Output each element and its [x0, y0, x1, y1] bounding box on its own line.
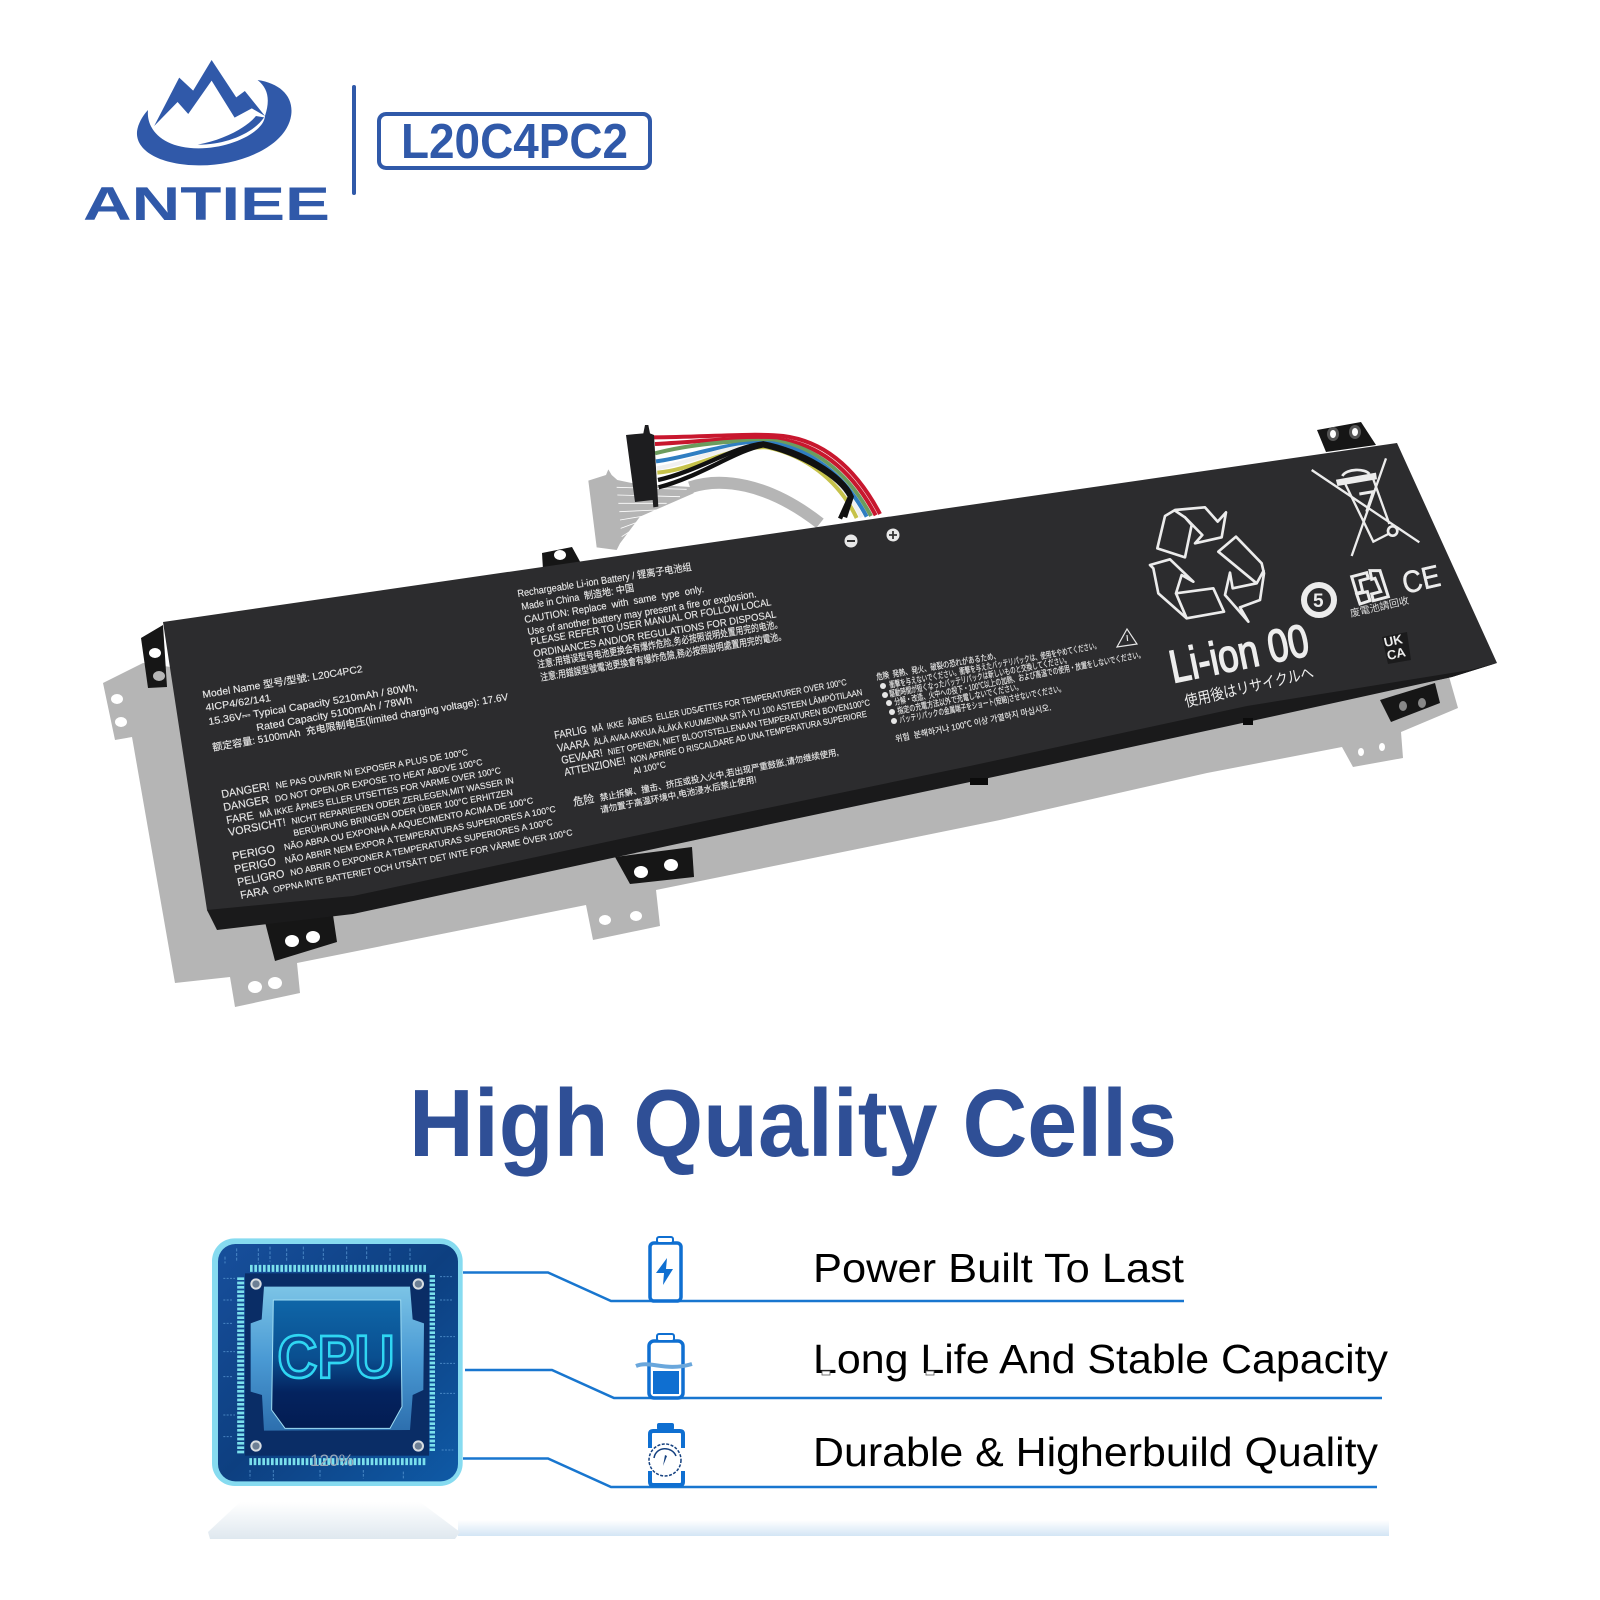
icon: battery with bolt — [650, 1237, 681, 1301]
battery label: caution block: Use of another battery may present a fire or explosion. — [527, 589, 757, 638]
battery label: caution block: Made in China 制造地: 中国 — [520, 581, 635, 613]
battery label: danger warnings: PERIGO NÃO ABRIR NEM EXPOR A TEMPERATURAS SUPERIORES A 100°C — [233, 803, 557, 876]
battery label: danger warnings: FARE MÅ IKKE ÅPNES ELLER UTSETTES FOR VARME OVER 100°C — [225, 764, 502, 827]
battery label: multilingual warnings: FARLIG MÅ IKKE ÅBNES ELLER UDSÆTTES FOR TEMPERATURER OVER 100°C — [553, 676, 848, 742]
battery label: multilingual warnings: 危险 禁止拆解、撞击、挤压或投入火中,若出现严重鼓胀,请勿继续使用, — [572, 744, 840, 809]
battery label: caution block — [516, 560, 787, 684]
battery label: Japanese and Korean warnings: 駆動時間が短くなったバッテリパックは新しいものと交換してください。 — [888, 653, 1071, 699]
CPU text: CPU — [277, 1324, 395, 1391]
battery label: model and capacity: 4ICP4/62/141 — [205, 693, 272, 714]
icon: battery with gauge — [649, 1423, 683, 1485]
battery label: Japanese and Korean warnings: 衝撃を与えないでください。衝撃を与えたバッテリパックは、使用をやめてください。 — [888, 639, 1101, 690]
battery label: Japanese and Korean warnings — [875, 639, 1145, 744]
battery label: multilingual warnings: AI 100°C — [632, 759, 667, 776]
battery label: danger warnings — [220, 746, 574, 902]
battery label: Japanese and Korean warnings: 危険 発熱、発火、破裂の恐れがあるため、 — [875, 649, 1000, 682]
circuit traces — [223, 1247, 455, 1480]
Li-ion mark — [1165, 614, 1316, 711]
feature: Long Life And Stable Capacity: Long Life And Stable Capacity — [813, 1336, 1389, 1382]
edge notches — [970, 718, 1253, 785]
mounting tabs — [141, 422, 1440, 961]
divider — [352, 85, 356, 195]
chip carrier — [251, 1287, 424, 1431]
battery label: danger warnings: VORSICHT! NICHT REPARIEREN ODER ZERLEGEN,MIT WASSER IN — [227, 774, 515, 839]
CPU reflection — [208, 1502, 460, 1539]
battery label: caution block: ORDINANCES AND/OR REGULATIONS FOR DISPOSAL — [533, 609, 778, 660]
battery label: multilingual warnings — [553, 676, 872, 815]
icon: RoHS 5 mark — [1304, 585, 1334, 615]
Japanese recycle text: 使用後はリサイクルへ — [1183, 664, 1316, 711]
battery label: model and capacity: Rated Capacity 5100mAh / 78Wh — [256, 695, 413, 734]
battery label: Japanese and Korean warnings: 指定の充電方法以外で充電しないでください。 — [896, 680, 1023, 716]
battery label: multilingual warnings: GEVAAR! NIET OPENEN, NIET BLOOTSTELLENAAN TEMPERATUREN BOVEN100°C — [560, 696, 872, 767]
battery label: caution block: 注意:用错误型号电池更换会有爆炸危险,务必按照说明处置用完的电池。 — [536, 617, 783, 671]
battery label: model and capacity: Model Name 型号/型號: L20C4PC2 — [201, 662, 364, 701]
battery label: danger warnings: FARA OPPNA INTE BATTERIET OCH UTSÄTT DET INTE FOR VÄRME ÖVER 100°C — [239, 826, 574, 902]
battery label: danger warnings: BERÜHRUNG BRINGEN ODER ÜBER 100°C ERHITZEN — [293, 787, 514, 838]
lower dark edge — [207, 663, 1497, 930]
body — [163, 443, 1497, 928]
battery label: caution block: PLEASE REFER TO USER MANUAL OR FOLLOW LOCAL — [530, 597, 773, 648]
connector — [626, 425, 658, 507]
wire shadow — [588, 469, 820, 550]
UKCA mark — [1382, 631, 1411, 664]
wordmark: ANTIEE — [83, 177, 330, 230]
icon: RoHS 5 mark: 5 — [1313, 591, 1324, 612]
feature: Power Built To Last: Power Built To Last — [813, 1245, 1185, 1291]
icon: battery recycling mark — [1349, 571, 1410, 620]
reflection band — [208, 1502, 1389, 1539]
heading: High Quality Cells — [409, 1070, 1177, 1177]
icon: recycle symbol — [1150, 507, 1264, 622]
panel: CPU chip — [212, 1238, 463, 1486]
Li-ion mark: Li-ion 00 — [1165, 614, 1313, 693]
icon: battery half full with wave — [636, 1334, 692, 1398]
battery label: Japanese and Korean warnings: 위험 분해하거나 100℃ 이상 가열하지 마십시오. — [894, 702, 1052, 744]
battery shadow — [103, 520, 1458, 1007]
battery body — [141, 422, 1497, 961]
UKCA mark: UK — [1383, 631, 1405, 650]
battery wires and connector — [626, 425, 880, 519]
battery label: danger warnings: DANGER! NE PAS OUVRIR NI EXPOSER A PLUS DE 100°C — [220, 746, 469, 801]
tab holes — [149, 425, 1426, 947]
battery label: caution block: 注意:用錯誤型號電池更換會有爆炸危險,務必按照說明處置用完的電池。 — [539, 629, 787, 684]
CE mark: CE — [1399, 558, 1444, 601]
socket — [245, 1273, 429, 1456]
battery label: multilingual warnings: VAARA ÄLÄ AVAA AKKUA ÄLÄKÄ KUUMENNA SITÄ YLI 100 ASTEEN LÄMPÖTILAAN — [556, 686, 863, 755]
pins — [241, 1268, 432, 1462]
icon: mountain and swoosh — [137, 60, 292, 165]
model number badge: L20C4PC2 — [401, 115, 628, 169]
battery label: danger warnings: PELIGRO NO ABRIR O EXPONER A TEMPERATURAS SUPERIORES A 100°C — [236, 816, 554, 889]
battery label: Japanese and Korean warnings: 分解・改造、火中への投下・100℃以上の加熱、および高温での使用・放置をしないでください。 — [893, 648, 1145, 707]
battery label: caution block: Rechargeable Li-ion Battery / 锂离子电池组 — [516, 560, 692, 600]
screws — [251, 1279, 423, 1451]
battery label: multilingual warnings: ATTENZIONE! NON APRIRE O RISCALDARE AD UNA TEMPERATURA SUPERIORE — [563, 708, 868, 779]
battery label: danger warnings: DANGER DO NOT OPEN,OR EXPOSE TO HEAT ABOVE 100°C — [222, 756, 484, 814]
percent: 120% — [310, 1451, 354, 1470]
battery label: model and capacity: 15.36V⎓ Typical Capacity 5210mAh / 80Wh, — [208, 682, 419, 728]
caption: 废電池請回收 — [1349, 594, 1410, 620]
battery label: model and capacity: 额定容量: 5100mAh 充电限制电压(limited charging voltage): 17.6V — [211, 690, 509, 754]
battery label: multilingual warnings: 请勿置于高温环境中,电池浸水后禁止使用! — [599, 773, 757, 815]
chip die — [272, 1300, 402, 1428]
icon: crossed-out bin — [1312, 458, 1419, 556]
battery label: model and capacity — [201, 662, 509, 754]
terminal markers — [844, 528, 900, 548]
logo: ANTIEE brand — [83, 60, 330, 230]
battery label: caution block: CAUTION: Replace with same type only. — [524, 584, 705, 626]
feature: Durable and Higherbuild Quality: Durable & Higherbuild Quality — [813, 1429, 1379, 1475]
battery label: danger warnings: PERIGO NÃO ABRA OU EXPONHA A AQUECIMENTO ACIMA DE 100°C — [231, 794, 535, 863]
symbol — [1352, 571, 1388, 604]
wires — [654, 435, 880, 519]
connector lines — [463, 1272, 1382, 1487]
UKCA mark: CA — [1386, 644, 1408, 663]
icon: warning triangle — [1117, 629, 1137, 647]
battery label: Japanese and Korean warnings: バッテリパックの金属端子をショート(短絡)させないでください。 — [898, 682, 1065, 725]
